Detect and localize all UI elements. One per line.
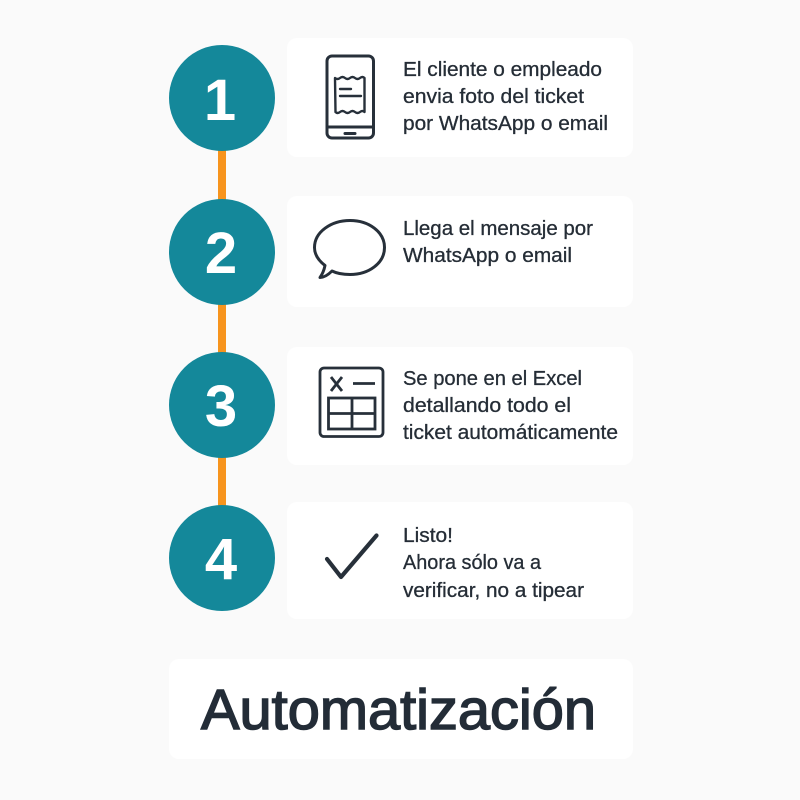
number badge 1: 1	[204, 68, 236, 133]
text: step 1: El cliente o empleado	[403, 59, 602, 81]
text: step 4: Ahora sólo va a	[403, 552, 542, 574]
step 1	[169, 38, 633, 157]
text: step 4: Listo!	[403, 525, 453, 547]
text: step 1: envia foto del ticket	[403, 86, 584, 108]
icon: check mark	[327, 536, 376, 577]
timeline connector	[218, 145, 226, 512]
text: step 1	[403, 59, 608, 135]
number badge 3	[169, 352, 275, 458]
text: step 3	[403, 368, 618, 444]
text: step 2: WhatsApp o email	[403, 245, 572, 267]
panel: step 2 card	[287, 196, 633, 307]
icon: phone with receipt	[327, 56, 374, 138]
number badge 3: 3	[205, 374, 237, 439]
text: step 2: Llega el mensaje por	[403, 218, 593, 240]
panel: step 4 card	[287, 502, 633, 619]
step 3	[169, 347, 633, 465]
icon: spreadsheet	[320, 368, 383, 436]
text: step 3: detallando todo el	[403, 395, 571, 417]
step 4	[169, 502, 633, 619]
text: step 4: verificar, no a tipear	[403, 580, 584, 602]
panel: step 1 card	[287, 38, 633, 157]
number badge 4: 4	[205, 527, 237, 592]
number badge 4	[169, 505, 275, 611]
number badge 2: 2	[205, 221, 237, 286]
step 2	[169, 196, 633, 307]
number badge 2	[169, 199, 275, 305]
panel: step 3 card	[287, 347, 633, 465]
icon: speech bubble	[314, 220, 384, 278]
text: step 3: ticket automáticamente	[403, 422, 618, 444]
title: Automatización	[201, 678, 596, 742]
number badge 1	[169, 45, 275, 151]
text: step 4	[403, 525, 584, 602]
text: step 3: Se pone en el Excel	[403, 368, 582, 390]
text: step 1: por WhatsApp o email	[403, 113, 608, 135]
text: step 2	[403, 218, 593, 267]
panel: title card	[169, 659, 633, 759]
